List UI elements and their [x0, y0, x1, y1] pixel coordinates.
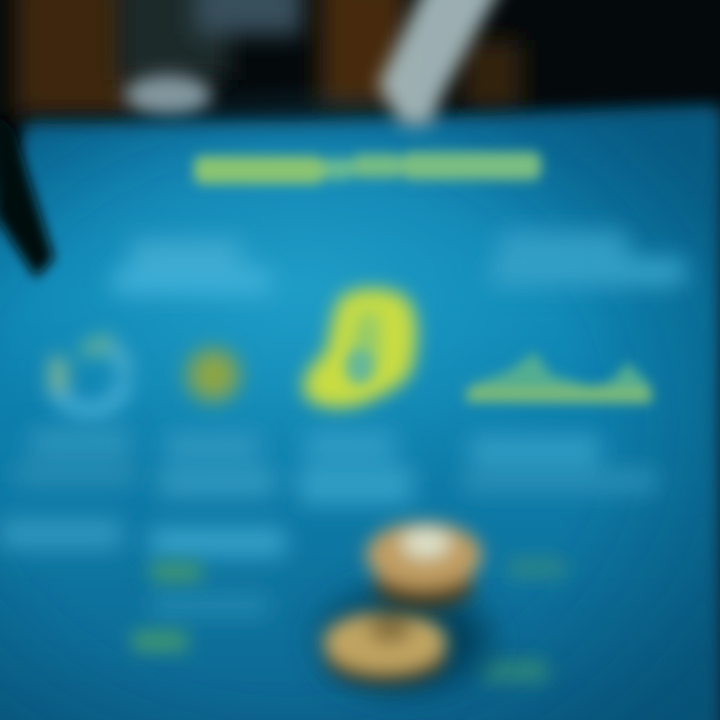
- icon: gold coin lower: [323, 612, 447, 684]
- icon: central yellow badge: [303, 288, 417, 408]
- white streak fading into the panel: [378, 0, 505, 125]
- small green labels: [132, 558, 566, 682]
- text block: upper left: [112, 240, 272, 294]
- icon: small gold circle: [183, 345, 243, 405]
- text block: lower second column: [150, 434, 286, 616]
- chart: green sparkline bars: [466, 352, 652, 404]
- coin shadow: [320, 590, 490, 690]
- dark pen on the left edge: [0, 110, 54, 278]
- text block: upper right: [490, 232, 686, 286]
- title: [194, 152, 541, 184]
- text block: lower right: [462, 436, 657, 492]
- text block: lower left column: [0, 430, 136, 548]
- background: dark desk scene: [0, 0, 720, 150]
- icon: gold coin upper: [366, 522, 482, 608]
- text block: lower centre: [298, 432, 413, 504]
- icon: circular arrows: [55, 340, 125, 410]
